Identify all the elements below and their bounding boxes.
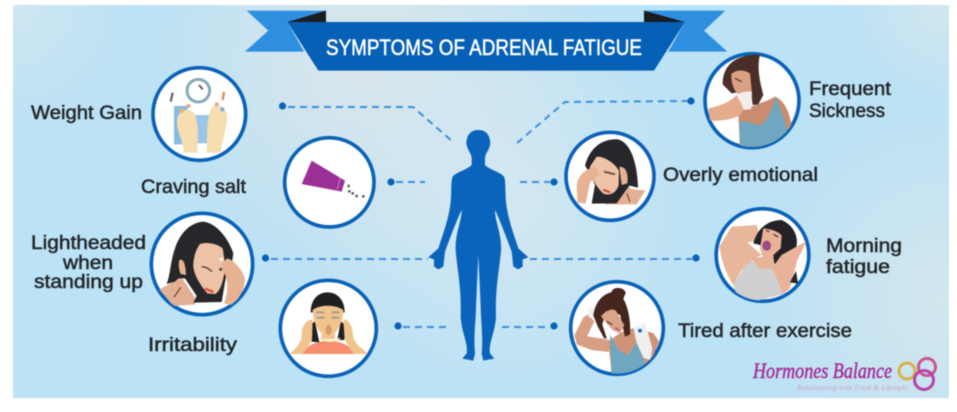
logo: Hormones Balance: Rebalancing with Food & Lifestyle <box>796 384 908 392</box>
icon: salt shaker <box>285 138 374 227</box>
icon: feet on weighing scale <box>153 68 246 160</box>
human body silhouette <box>428 130 528 361</box>
label: tired after exercise: Tired after exercise <box>678 321 852 342</box>
connector: irritability <box>394 322 451 330</box>
icon: woman sneezing into tissue <box>705 54 799 152</box>
title: SYMPTOMS OF ADRENAL FATIGUE <box>326 35 642 60</box>
logo: Hormones Balance: Hormones Balance <box>752 358 892 383</box>
connector: lightheaded <box>262 254 428 262</box>
label: lightheaded when standing up: Lightheaded <box>31 233 146 254</box>
icon: irritable woman covering ears <box>280 280 376 376</box>
label: craving salt: Craving salt <box>141 177 247 198</box>
label: weight gain: Weight Gain <box>31 103 142 124</box>
label: lightheaded when standing up: when <box>62 253 113 274</box>
label: overly emotional: Overly emotional <box>663 165 818 186</box>
label: frequent sickness <box>809 79 892 122</box>
icon: woman yawning and stretching <box>716 209 809 302</box>
label: morning fatigue: Morning <box>826 236 902 257</box>
connector: craving salt <box>387 178 425 186</box>
connector: overly emotional <box>520 178 558 186</box>
connector: tired after exercise <box>502 322 558 330</box>
label: lightheaded when standing up: standing up <box>34 272 143 293</box>
icon: lightheaded woman <box>151 213 253 315</box>
label: morning fatigue <box>826 236 902 278</box>
connector: morning fatigue <box>530 254 700 262</box>
label: lightheaded when standing up <box>31 233 146 293</box>
logo: Hormones Balance <box>752 358 936 392</box>
icon: tired woman with towel <box>571 282 663 376</box>
label: frequent sickness: Sickness <box>809 101 885 122</box>
title banner <box>245 11 727 71</box>
label: irritability: Irritability <box>148 335 238 356</box>
label: frequent sickness: Frequent <box>809 79 892 100</box>
label: morning fatigue: fatigue <box>826 257 890 278</box>
connector: weight gain <box>279 102 452 141</box>
icon: woman holding forehead, emotional <box>566 132 654 220</box>
connector: frequent sickness <box>517 97 695 143</box>
